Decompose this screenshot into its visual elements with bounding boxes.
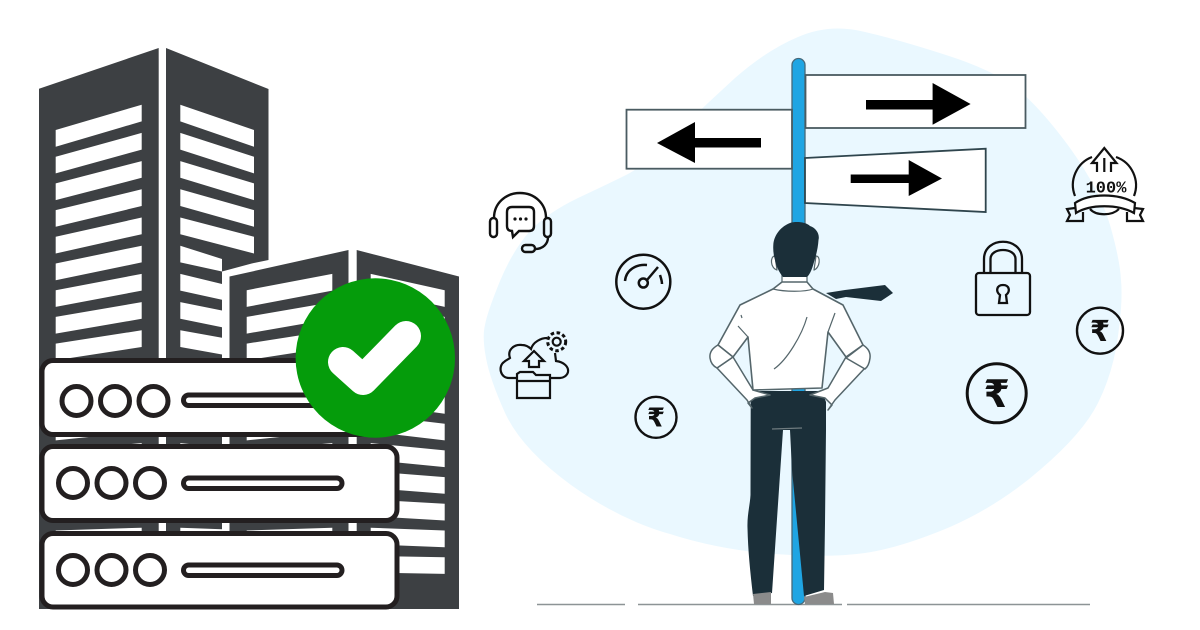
signpost pole	[792, 58, 805, 604]
icon: small building	[230, 250, 459, 609]
sign: left arrow	[626, 110, 792, 169]
person seen from behind	[710, 222, 893, 604]
shirt cuffs	[710, 345, 870, 369]
sign: lower right arrow	[805, 149, 986, 212]
icon: rupee coin small: ₹	[647, 404, 665, 434]
icon: speed gauge	[616, 255, 670, 309]
server rack: top unit	[42, 360, 384, 434]
icon: rupee coin right: ₹	[1090, 314, 1110, 348]
shirt	[718, 282, 863, 390]
label: 100%: 100%	[1086, 180, 1127, 198]
icon: padlock	[976, 242, 1030, 315]
icon: rupee coin small	[636, 397, 676, 438]
panel: decision signpost illustration	[484, 28, 1143, 604]
ground line	[537, 604, 1090, 606]
icon: rupee coin large: ₹	[983, 372, 1010, 416]
icon: cloud upload with gear	[501, 333, 568, 398]
flying tie	[826, 285, 893, 301]
shoes	[753, 592, 834, 604]
sign: top right arrow	[806, 75, 1026, 128]
icon: headset support	[490, 193, 551, 252]
icon: rupee coin right	[1077, 308, 1123, 354]
server rack: bottom unit	[42, 534, 397, 607]
icon: tall building	[39, 48, 268, 609]
icon: green check badge	[296, 278, 455, 438]
background blob	[484, 28, 1122, 556]
shirt creases	[738, 289, 835, 369]
icon: rupee coin large	[967, 364, 1026, 423]
trouser seam	[772, 428, 802, 429]
hair	[773, 222, 819, 277]
panel: data centre illustration	[39, 48, 459, 609]
trousers	[747, 391, 826, 596]
server rack: middle unit	[42, 446, 397, 520]
ears and neck	[771, 256, 819, 284]
forearms and hands	[717, 357, 865, 410]
icon: 100 percent badge	[1067, 148, 1143, 221]
